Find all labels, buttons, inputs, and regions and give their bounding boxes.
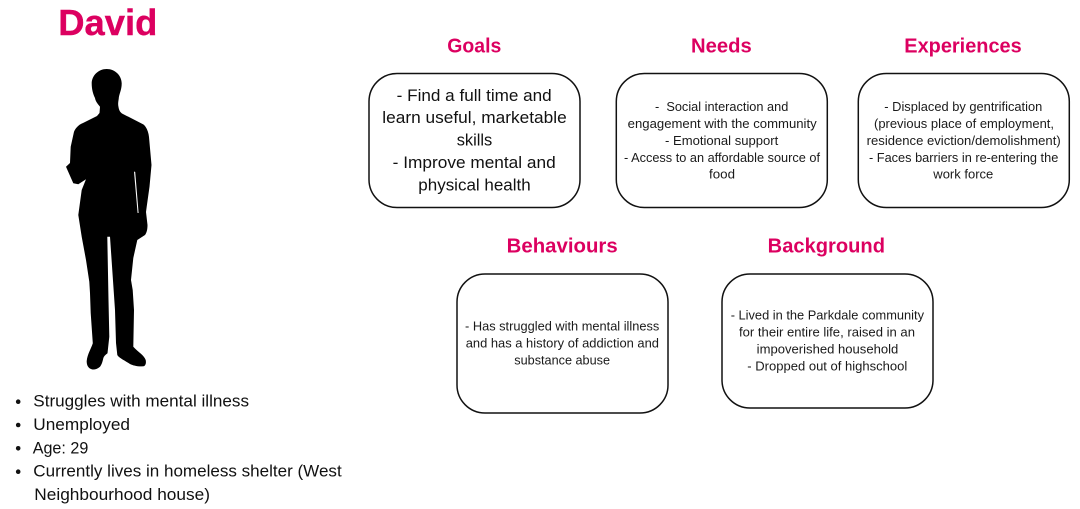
- panel: experiences: - Displaced by gentrification: [884, 99, 1042, 114]
- bullet list: persona facts: Unemployed: [33, 415, 130, 434]
- panel: needs: - Access to an affordable source of: [624, 150, 820, 165]
- heading: experiences: Experiences: [904, 36, 1022, 58]
- panel: behaviours: [457, 236, 668, 413]
- panel: background: [722, 236, 933, 408]
- heading: behaviours: Behaviours: [507, 236, 618, 258]
- bullet list: persona facts: Currently lives in homeless shelter (West: [33, 462, 342, 481]
- panel: behaviours: - Has struggled with mental illness: [465, 319, 660, 334]
- panel: goals: learn useful, marketable: [382, 108, 567, 127]
- panel: background: - Dropped out of highschool: [747, 358, 907, 374]
- heading: goals: Goals: [447, 36, 501, 58]
- panel: needs: - Social interaction and: [655, 99, 788, 114]
- panel: behaviours: substance abuse: [514, 352, 610, 367]
- heading: needs: Needs: [691, 36, 752, 58]
- title: persona name: David: [58, 2, 157, 43]
- panel: needs: - Emotional support: [665, 133, 779, 148]
- icon: standing man silhouette: [66, 69, 152, 370]
- panel: goals: physical health: [418, 176, 531, 194]
- panel: experiences: work force: [932, 167, 993, 182]
- panel: needs: engagement with the community: [628, 116, 817, 131]
- panel: experiences: [858, 36, 1069, 208]
- bullet list: persona facts: [16, 392, 342, 504]
- panel: background: - Lived in the Parkdale community: [731, 308, 924, 323]
- panel: background: for their entire life, raised in an: [739, 325, 915, 340]
- bullet list: persona facts: Neighbourhood house): [34, 485, 210, 504]
- bullet list: persona facts: Age: 29: [33, 438, 88, 457]
- panel: needs: [616, 36, 827, 208]
- panel: experiences: - Faces barriers in re-entering the: [869, 150, 1058, 165]
- panel: goals: [369, 36, 580, 208]
- heading: background: Background: [768, 236, 885, 258]
- panel: goals: - Improve mental and: [393, 153, 556, 172]
- panel: goals: - Find a full time and: [397, 86, 552, 105]
- panel: experiences: (previous place of employment,: [874, 116, 1054, 131]
- panel: behaviours: and has a history of addiction and: [466, 336, 659, 350]
- panel: goals: skills: [457, 130, 492, 150]
- panel: needs: food: [709, 167, 735, 182]
- panel: experiences: residence eviction/demolishment): [867, 133, 1061, 148]
- bullet list: persona facts: Struggles with mental illness: [33, 392, 249, 411]
- panel: background: impoverished household: [757, 342, 898, 357]
